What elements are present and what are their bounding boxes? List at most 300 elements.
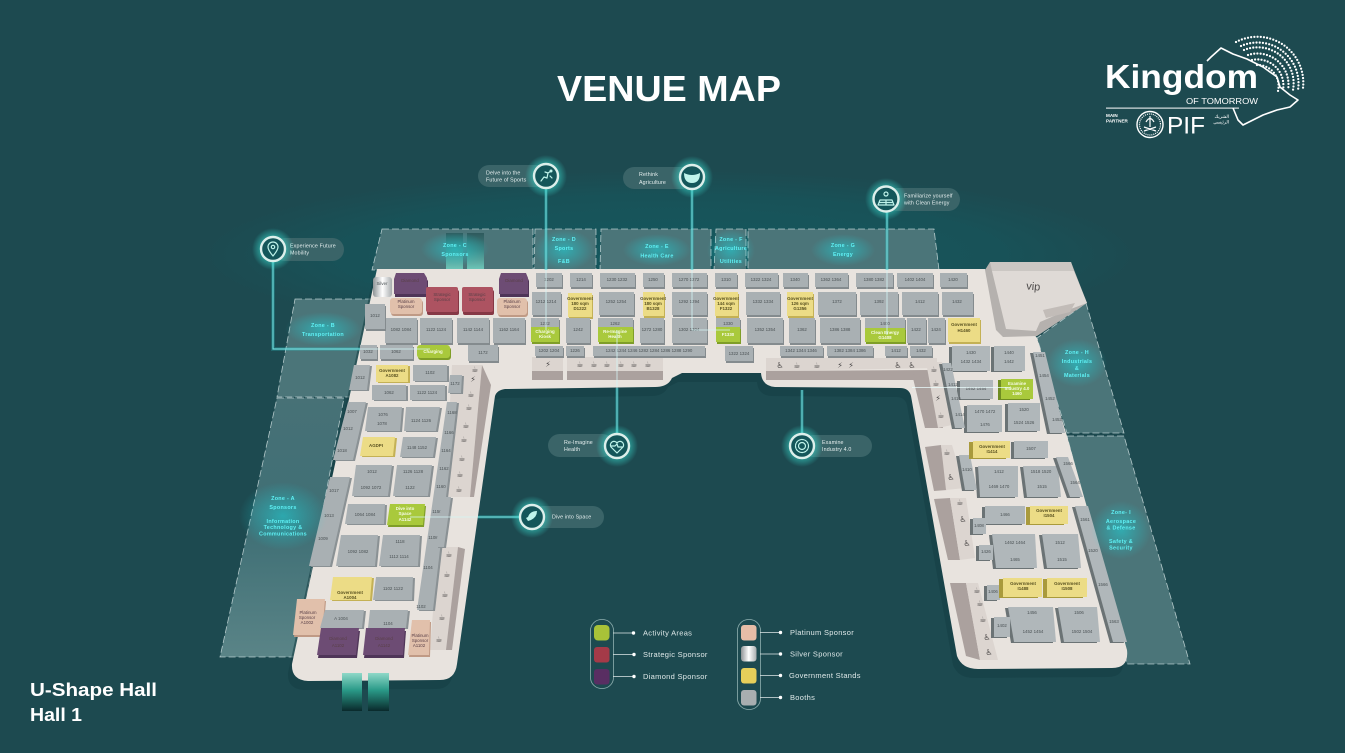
callout: future mobility: Experience Future bbox=[290, 244, 336, 250]
zone D bbox=[534, 229, 596, 270]
booths row 4: 1242 1244 1246 1282 1284 1286 1288 1290 bbox=[606, 348, 693, 353]
logo tagline: OF TOMORROW bbox=[1186, 96, 1258, 106]
utility block right arm 1: ☕ bbox=[930, 365, 938, 374]
connector line, right arm bbox=[912, 386, 1010, 388]
callout: sports bbox=[478, 155, 567, 330]
diamond sponsor bottom left bbox=[317, 628, 359, 655]
booths row 4: 1322 1324 bbox=[729, 351, 750, 356]
zone B bbox=[277, 299, 374, 397]
booths upper left: 1092 1082 bbox=[348, 549, 369, 554]
booths upper left: 1007 bbox=[347, 409, 357, 414]
utility block left arm upper: ☕ bbox=[467, 390, 475, 399]
right arm stands bbox=[942, 346, 1127, 642]
booths right arm: 1563 bbox=[1109, 619, 1119, 624]
zone B label bbox=[285, 312, 361, 346]
diamond sponsor: Diamond bbox=[401, 278, 419, 283]
government stands top block: 126 sqm bbox=[791, 301, 809, 306]
platinum sponsor right: Platinum bbox=[411, 633, 429, 638]
booths right arm: 1518 1520 bbox=[1031, 469, 1052, 474]
legend capsule bbox=[738, 620, 760, 710]
government stands top block bbox=[567, 292, 980, 342]
booths right arm: 1469 1470 bbox=[989, 484, 1010, 489]
legend item: diamond sponsor: Diamond Sponsor bbox=[643, 672, 708, 681]
government stand I1414 bbox=[973, 441, 1010, 458]
booths upper left: 1017 bbox=[329, 488, 339, 493]
legend item: platinum sponsor: Platinum Sponsor bbox=[790, 628, 854, 637]
booths top block, row 3: 1142 1144 bbox=[463, 327, 484, 332]
booths top block, row 3: 1330 bbox=[723, 321, 733, 326]
government stand I1504: Government bbox=[1036, 508, 1062, 513]
booths top block, row 3: 1122 1124 bbox=[426, 327, 447, 332]
platinum sponsor left bbox=[293, 599, 325, 635]
booths right arm: 1502 1504 bbox=[1072, 629, 1093, 634]
platinum sponsor: Platinum bbox=[397, 299, 415, 304]
booths row 4: 1226 bbox=[570, 348, 580, 353]
activity areas top block: Charging bbox=[535, 329, 555, 334]
long booth strip: 1102 bbox=[416, 604, 426, 609]
utility block right arm 3: ♿ bbox=[959, 515, 967, 524]
utility block top centre left: ☕ bbox=[576, 360, 584, 369]
booths upper left: 1009 bbox=[318, 536, 328, 541]
zone H bbox=[1037, 303, 1124, 433]
booths upper left: 1102 1122 bbox=[383, 586, 404, 591]
booths upper left: 1124 1126 bbox=[411, 418, 432, 423]
government stand upper left: Government bbox=[379, 368, 405, 373]
legend capsule bbox=[590, 620, 614, 688]
utility block left arm upper: ☕ bbox=[460, 435, 468, 444]
zone F label: Utilities bbox=[720, 259, 742, 265]
utility block right arm 4: ♿ bbox=[985, 648, 993, 657]
zone E bbox=[600, 229, 711, 270]
utility block left arm upper: ☕ bbox=[462, 421, 470, 430]
booths top block, row 3: 1082 1084 bbox=[391, 327, 412, 332]
booths top block, row 3: 1362 bbox=[797, 327, 807, 332]
hall label bbox=[30, 679, 157, 725]
legend item: strategic sponsor: Strategic Sponsor bbox=[643, 650, 708, 659]
government stand I1488 bbox=[1003, 578, 1042, 597]
booths top block, row 2: 1412 bbox=[915, 299, 925, 304]
legend item: government stands: Government Stands bbox=[789, 671, 861, 680]
zone A label: Communications bbox=[259, 532, 307, 538]
booths top block, row 1: 1420 bbox=[948, 277, 958, 282]
zone B label: Transportation bbox=[302, 332, 344, 338]
strategic sponsor bbox=[426, 287, 458, 312]
booths upper left: 1092 1072 bbox=[361, 485, 382, 490]
booths upper left: 1064 1084 bbox=[355, 512, 376, 517]
booths row 4: 1032 bbox=[363, 349, 373, 354]
booths top block, row 1: 1214 bbox=[576, 277, 586, 282]
diamond sponsor: Diamond bbox=[505, 278, 523, 283]
booths top block, row 1: 1202 bbox=[544, 277, 554, 282]
narrow booth strip bbox=[436, 497, 451, 547]
zone D label: Sports bbox=[555, 246, 573, 252]
booths upper left: 1118 bbox=[395, 539, 405, 544]
utility block top centre right: ♿ bbox=[894, 361, 902, 370]
utility block top centre right: ♿ bbox=[908, 361, 916, 370]
government stands top block: Government bbox=[713, 296, 739, 301]
diamond sponsor bottom right: A1142 bbox=[378, 643, 391, 648]
zone A label: Zone - A bbox=[271, 496, 295, 502]
booths right arm: 1414 bbox=[955, 412, 965, 417]
government stand A1004 bbox=[330, 577, 372, 600]
utility block right arm 4: ♿ bbox=[983, 633, 991, 642]
zone E label bbox=[623, 234, 691, 266]
government stand I1414: Government bbox=[979, 444, 1005, 449]
callout: agriculture bbox=[623, 156, 730, 330]
silver sponsor: Silver bbox=[377, 281, 388, 286]
utility block left arm lower: ☕ bbox=[435, 635, 443, 644]
legend left: categories bbox=[590, 620, 708, 688]
long booth strip bbox=[416, 402, 457, 610]
utility block left arm lower: ☕ bbox=[438, 613, 446, 622]
activity area Give Into Space bbox=[387, 504, 425, 525]
zone H label: & bbox=[1075, 366, 1079, 372]
zone I label: Safety & bbox=[1109, 539, 1133, 545]
government stand I1414: I1414 bbox=[986, 449, 998, 454]
zone G label bbox=[811, 234, 875, 266]
long booth strip: 1168 bbox=[447, 410, 457, 415]
booth above sponsor bbox=[368, 610, 408, 628]
booths right arm: 1412 bbox=[948, 382, 958, 387]
legend right: categories bbox=[738, 620, 861, 710]
zone D label bbox=[534, 229, 594, 271]
hall label: U-Shape Hall bbox=[30, 679, 157, 700]
booths right arm: 1466 bbox=[1000, 512, 1010, 517]
logo PIF: PIF bbox=[1167, 112, 1205, 140]
zone C bbox=[372, 229, 533, 270]
utility block right arm 4: ☕ bbox=[976, 599, 984, 608]
booths upper left: 1112 1114 bbox=[389, 554, 409, 559]
utility block top centre left: ☕ bbox=[617, 360, 625, 369]
utility block left arm upper bbox=[445, 365, 491, 497]
booths right arm: 1506 bbox=[1074, 610, 1084, 615]
logo map outline bbox=[1207, 48, 1298, 125]
diamond sponsor bottom right: Diamond bbox=[375, 636, 393, 641]
booths row 4: 1382 1384 1386 bbox=[834, 348, 866, 353]
booths top block, row 1 bbox=[536, 273, 967, 287]
booths right arm bbox=[942, 346, 1127, 642]
booths top block, row 2: 1372 bbox=[832, 299, 842, 304]
booths right arm: 1515 bbox=[1037, 484, 1047, 489]
zone E label: Zone - E bbox=[645, 244, 669, 250]
callout: health bbox=[548, 330, 638, 467]
booths upper left bbox=[309, 365, 462, 600]
government stands top block: B1328 bbox=[647, 306, 660, 311]
booths right arm: 1432 1434 bbox=[961, 359, 982, 364]
background glow bbox=[200, 170, 1140, 340]
zone G label: Energy bbox=[833, 252, 853, 258]
booths upper left: 1078 bbox=[377, 421, 387, 426]
booths top block, row 2: 1212 1214 bbox=[536, 299, 557, 304]
booths row 4: 1202 1204 bbox=[539, 348, 560, 353]
booths top block, row 3: 1222 bbox=[540, 321, 550, 326]
zone C label: Zone - C bbox=[443, 243, 467, 249]
booths top block, row 1: 1362 1364 bbox=[821, 277, 842, 282]
callout: industry 4.0 bbox=[781, 390, 872, 467]
booths right arm: 1442 bbox=[1004, 359, 1014, 364]
activity area right arm: Examine bbox=[1008, 381, 1027, 386]
utility block top left bbox=[532, 357, 563, 380]
utility block top centre right: ☕ bbox=[813, 361, 821, 370]
diamond sponsor bottom left: Diamond bbox=[329, 636, 347, 641]
activity area right arm bbox=[1001, 379, 1033, 399]
callout: clean energy bbox=[865, 178, 960, 335]
booths upper left: 1102 bbox=[425, 370, 435, 375]
booths right arm: 1520 bbox=[1088, 548, 1098, 553]
booths upper left: 1012 bbox=[343, 426, 353, 431]
government stands top block: D1222 bbox=[574, 306, 587, 311]
strategic sponsor: Strategic bbox=[433, 292, 451, 297]
booths right arm: 1440 bbox=[1004, 350, 1014, 355]
booths right arm: 1520 bbox=[1019, 407, 1029, 412]
callout: space: Dive into Space bbox=[552, 514, 591, 520]
long booth strip: 1166 bbox=[444, 430, 454, 435]
long booth strip: 1150 bbox=[432, 509, 442, 514]
platinum sponsor left: Platinum bbox=[299, 610, 317, 615]
floor shadow bbox=[288, 278, 1123, 690]
booths top block, row 3: 1400 bbox=[880, 321, 890, 326]
legend item: booths: Booths bbox=[790, 693, 815, 702]
callout: sports: Delve into the bbox=[486, 170, 520, 176]
long booth strip: 1108 bbox=[428, 535, 438, 540]
booths right arm: 1426 bbox=[981, 549, 991, 554]
utility block right arm 2: ☕ bbox=[943, 448, 951, 457]
activity areas top block: Clean Energy bbox=[871, 330, 900, 335]
utility block left arm upper: ☕ bbox=[456, 470, 464, 479]
legend item: silver sponsor: Silver Sponsor bbox=[790, 650, 843, 658]
booths right arm: 1566 bbox=[1098, 582, 1108, 587]
zone C label: Sponsors bbox=[441, 252, 469, 258]
booths top block, row 3 bbox=[365, 304, 945, 343]
diamond sponsor bbox=[394, 273, 427, 294]
strategic sponsor: Sponsor bbox=[434, 297, 451, 302]
booths right arm: 1515 bbox=[1057, 557, 1067, 562]
VIP building: vip bbox=[1026, 280, 1041, 294]
booths upper left: 1018 bbox=[337, 448, 347, 453]
zone labels bbox=[239, 229, 1151, 559]
government stand I1488: Government bbox=[1010, 581, 1036, 586]
callout: health: Re-Imagine bbox=[564, 440, 593, 446]
booths upper left: 1148 1152 bbox=[407, 445, 428, 450]
utility block left arm upper: ☕ bbox=[455, 485, 463, 494]
booths top block, row 1: 1250 bbox=[648, 277, 658, 282]
booths upper left: 1062 bbox=[384, 390, 394, 395]
government stand upper left bbox=[376, 365, 408, 382]
zone F bbox=[714, 229, 746, 270]
booths upper left: 1122 1124 bbox=[417, 390, 438, 395]
booths right arm: 1462 1464 bbox=[1005, 540, 1026, 545]
legend item: activity areas: Activity Areas bbox=[643, 628, 692, 638]
government stands top block: 144 sqm bbox=[717, 301, 735, 306]
government stands top block: G1356 bbox=[793, 306, 807, 311]
booths row 4 bbox=[360, 345, 932, 361]
zone F label: Zone - F bbox=[719, 237, 743, 243]
hall label: Hall 1 bbox=[30, 704, 82, 725]
zone H label bbox=[1047, 339, 1107, 387]
booths top block, row 1: 1340 bbox=[790, 277, 800, 282]
booths right arm: 1452 bbox=[1045, 396, 1055, 401]
booths row 4: 1172 bbox=[478, 350, 488, 355]
government stand upper left: A1082 bbox=[386, 373, 399, 378]
booths row 4: 1412 bbox=[891, 348, 901, 353]
logo arabic: الشريك bbox=[1215, 115, 1229, 120]
long booth strip: 1162 bbox=[439, 466, 449, 471]
logo: Kingdom of Tomorrow, PIF main partner bbox=[1105, 37, 1303, 140]
logo divider bbox=[1106, 108, 1239, 109]
activity areas top block: F1330 bbox=[722, 332, 735, 337]
zone F label bbox=[707, 229, 755, 271]
strategic sponsor bbox=[462, 287, 493, 312]
booths top block, row 2: 1392 bbox=[874, 299, 884, 304]
government stand AGDPI: AGDPI bbox=[369, 443, 383, 448]
booths right arm: 1408 bbox=[974, 523, 984, 528]
booths right arm: 1476 bbox=[980, 422, 990, 427]
callout: health: Health bbox=[564, 447, 580, 453]
government stand A1004: A1004 bbox=[344, 595, 357, 600]
government stand A1004: Government bbox=[337, 590, 363, 595]
logo wordmark: Kingdom bbox=[1105, 58, 1258, 95]
sponsor gates in zone C bbox=[446, 233, 484, 270]
booths right arm: 1422 bbox=[943, 367, 953, 372]
activity areas top block: Kiosk bbox=[539, 334, 552, 339]
booths upper left: 1076 bbox=[378, 412, 388, 417]
booths top block, row 1: 1322 1324 bbox=[751, 277, 772, 282]
left arm stands bbox=[293, 365, 462, 655]
booths right arm: 1430 bbox=[966, 350, 976, 355]
utility block top centre right bbox=[766, 358, 937, 380]
booths right arm: 1406 bbox=[988, 589, 998, 594]
booths top block, row 3: 1242 bbox=[573, 327, 583, 332]
long booth strip: 1164 bbox=[441, 448, 451, 453]
diamond sponsor bbox=[499, 273, 528, 294]
booths row 4: 1432 bbox=[916, 348, 926, 353]
platinum sponsor right: A1102 bbox=[413, 643, 426, 648]
utility block left arm upper: ☕ bbox=[471, 365, 479, 374]
utility block left arm lower bbox=[430, 547, 465, 650]
zone E label: Health Care bbox=[640, 254, 674, 260]
platinum sponsor left: Sponsor bbox=[299, 615, 316, 620]
platinum sponsor: Sponsor bbox=[398, 304, 415, 309]
zone G label: Zone - G bbox=[831, 243, 855, 249]
utility block right arm 4: ☕ bbox=[973, 586, 981, 595]
platinum sponsor left: A1002 bbox=[301, 620, 314, 625]
activity areas top block bbox=[417, 327, 905, 358]
booths top block, row 3: 1386 1388 bbox=[830, 327, 851, 332]
government stand I1508: Government bbox=[1054, 581, 1080, 586]
zone A bbox=[220, 398, 344, 657]
activity area Give Into Space: A1142 bbox=[399, 517, 412, 522]
zone I bbox=[1067, 436, 1190, 664]
utility block top centre right: ⚡ bbox=[837, 361, 843, 370]
utility block top centre right: ☕ bbox=[793, 361, 801, 370]
booths top block, row 3: 1302 1304 bbox=[679, 327, 700, 332]
callout: agriculture: Rethink bbox=[639, 172, 658, 178]
booths top block, row 2: 1292 1294 bbox=[679, 299, 700, 304]
utility block left arm upper: ☕ bbox=[458, 454, 466, 463]
utility block top left: ⚡ bbox=[545, 360, 551, 369]
utility block right arm 1 bbox=[912, 362, 952, 428]
utility block right arm 3 bbox=[934, 498, 975, 560]
government stands top block: Government bbox=[787, 296, 813, 301]
booths right arm: 1454 bbox=[1039, 373, 1049, 378]
utility block top centre right: ⚡ bbox=[848, 361, 854, 370]
sponsor stands, top left block bbox=[373, 273, 528, 315]
booths row 4: 1342 1344 1346 bbox=[785, 348, 817, 353]
activity area Give Into Space: Space bbox=[399, 511, 412, 516]
zone D label: Zone - D bbox=[552, 237, 576, 243]
zone I label: Zone- I bbox=[1111, 510, 1131, 516]
booths right arm: 1507 bbox=[1026, 446, 1036, 451]
booths top block, row 1: 1380 1382 bbox=[864, 277, 885, 282]
activity area right arm: 1460 bbox=[1012, 391, 1022, 396]
activity areas top block: Charging bbox=[423, 349, 443, 354]
activity area Give Into Space: Dive into bbox=[396, 506, 415, 511]
booths right arm: 1452 1454 bbox=[966, 386, 987, 391]
activity areas top block: Health bbox=[608, 334, 622, 339]
government stands top block: F1322 bbox=[720, 306, 733, 311]
strategic sponsor: Strategic bbox=[468, 292, 486, 297]
long booth strip: 1160 bbox=[436, 484, 446, 489]
platinum sponsor: Platinum bbox=[503, 299, 521, 304]
booths right arm: 1410 bbox=[962, 467, 972, 472]
government stands top block: 180 sqm bbox=[644, 301, 662, 306]
booths right arm: 1561 bbox=[1080, 517, 1090, 522]
booths top block, row 2: 1332 1334 bbox=[753, 299, 774, 304]
callout: industry 4.0: Examine bbox=[822, 440, 844, 446]
utility blocks with service icons bbox=[430, 357, 998, 660]
utility block right arm 1: ⚡ bbox=[935, 394, 941, 403]
booths right arm: 1465 bbox=[1010, 557, 1020, 562]
utility block right arm 4: ☕ bbox=[979, 615, 987, 624]
platinum sponsor right: Sponsor bbox=[412, 638, 429, 643]
government stand I1508: I1508 bbox=[1062, 586, 1073, 591]
utility block left arm upper: ☕ bbox=[465, 403, 473, 412]
callout: clean energy: with Clean Energy bbox=[904, 200, 950, 206]
callout: agriculture: Agriculture bbox=[639, 180, 666, 186]
callout: industry 4.0: Industry 4.0 bbox=[822, 447, 851, 453]
utility block right arm 4 bbox=[950, 583, 998, 660]
booths top block, row 1: 1402 1404 bbox=[905, 277, 926, 282]
booths right arm: 1416 bbox=[951, 396, 961, 401]
platinum sponsor: Sponsor bbox=[504, 304, 521, 309]
booths right arm: 1452 1454 bbox=[1023, 629, 1044, 634]
booths row 4: 1062 bbox=[391, 349, 401, 354]
government stands top block: 180 sqm bbox=[571, 301, 589, 306]
callout: space bbox=[410, 496, 604, 538]
government stand I1488: I1488 bbox=[1018, 586, 1029, 591]
booths upper left: 1126 1128 bbox=[403, 469, 424, 474]
utility block right arm 3: ♿ bbox=[963, 539, 971, 548]
zone D label: F&B bbox=[558, 259, 570, 265]
government stands top block: Government bbox=[640, 296, 666, 301]
silver sponsor bbox=[373, 277, 392, 297]
zone A label: Sponsors bbox=[269, 505, 297, 511]
government stand AGDPI bbox=[360, 437, 395, 456]
logo seal bbox=[1137, 112, 1163, 138]
diamond sponsor bottom left: A1102 bbox=[332, 643, 345, 648]
booths top block, row 3: 1272 1280 bbox=[642, 327, 663, 332]
zone A label: Technology & bbox=[264, 525, 302, 531]
VIP building bbox=[985, 262, 1087, 337]
booth above sponsor bbox=[320, 610, 364, 628]
zone B label: Zone - B bbox=[311, 323, 335, 329]
zone A label bbox=[239, 482, 327, 550]
zone H label: Industrials bbox=[1062, 359, 1092, 365]
booths right arm: 1512 bbox=[1055, 540, 1065, 545]
booths right arm: 1524 1526 bbox=[1014, 420, 1035, 425]
activity areas top block: Re-Imagine bbox=[603, 329, 627, 334]
booths right arm: 1402 bbox=[997, 623, 1007, 628]
